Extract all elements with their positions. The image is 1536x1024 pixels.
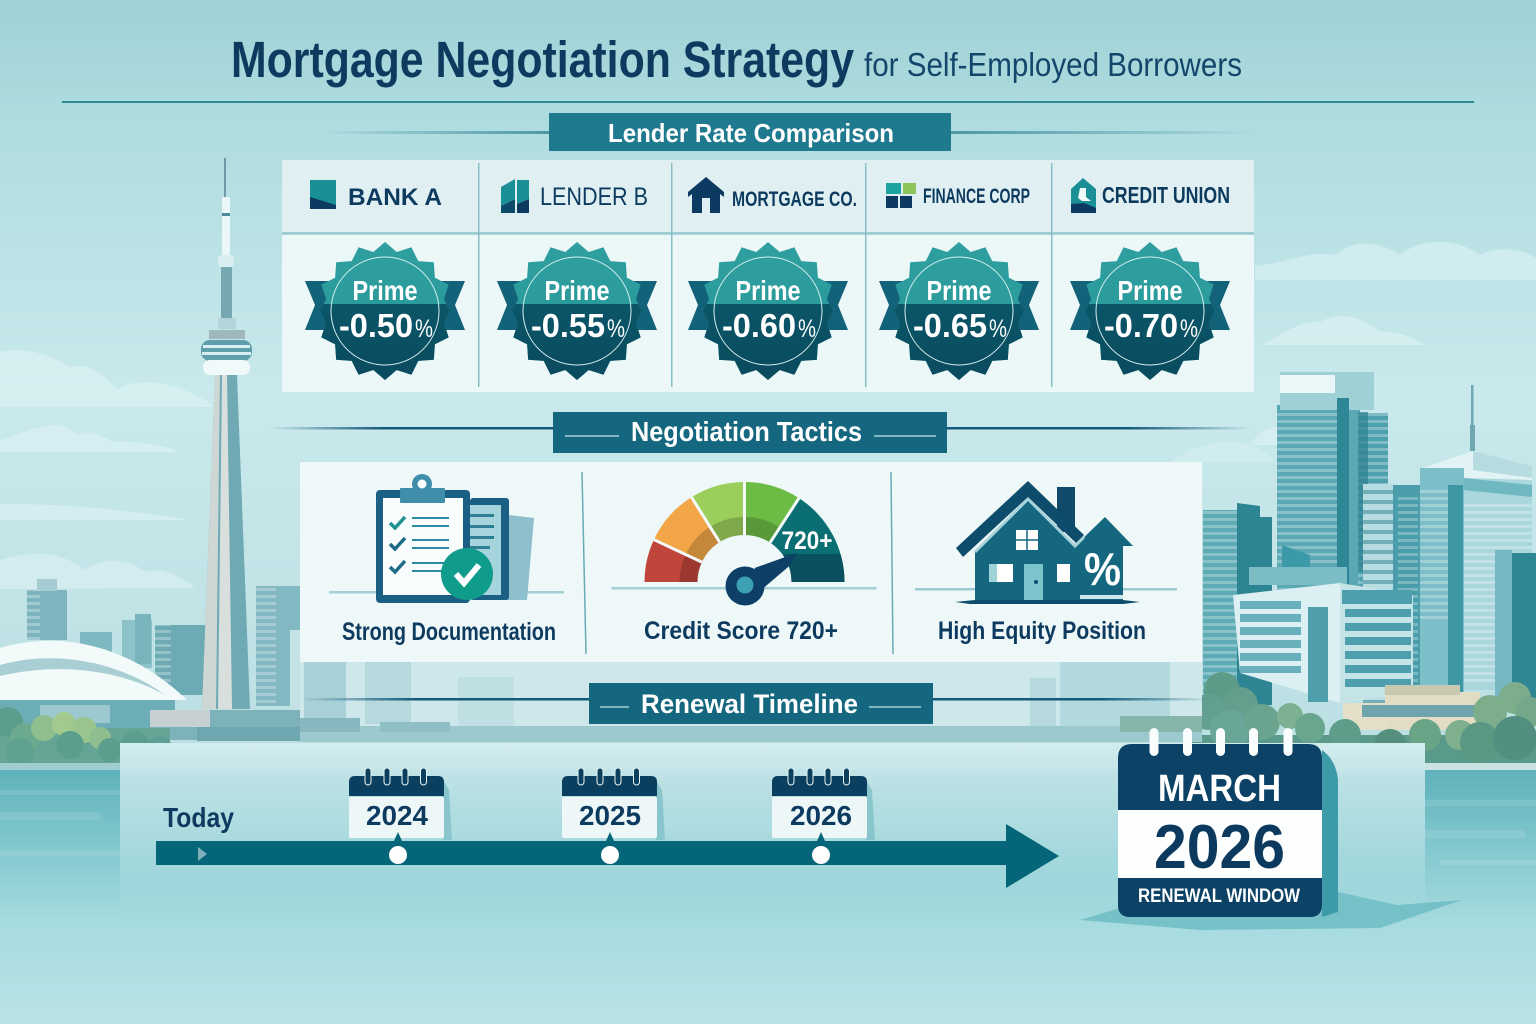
icon: credit score gauge	[612, 482, 876, 606]
label: High Equity Position: High Equity Position	[938, 617, 1146, 645]
badge: Prime -0.60%: %	[798, 315, 816, 343]
panel: negotiation tactics	[300, 462, 1202, 662]
logo: Bank A	[310, 180, 442, 211]
calendar: 2025	[562, 768, 665, 864]
logo: Bank A: BANK A	[348, 184, 442, 211]
background: clouds	[0, 242, 1536, 589]
title: for Self-Employed Borrowers	[864, 46, 1242, 83]
panel: lender rate comparison	[282, 160, 1254, 392]
badge: Prime -0.60%	[688, 242, 848, 380]
calendar: 2026	[772, 768, 875, 864]
background: water	[0, 770, 1536, 1024]
badge: Prime -0.50%	[305, 242, 465, 380]
logo: Lender B	[501, 179, 648, 213]
badge: Prime -0.70%: -0.70	[1104, 307, 1178, 344]
badge: Prime -0.60%: Prime	[736, 275, 800, 306]
background: water ripples	[0, 790, 1536, 865]
logo: Credit Union	[1071, 178, 1230, 213]
background: stadium dome	[0, 641, 187, 730]
logo: Finance Corp: FINANCE CORP	[923, 185, 1030, 208]
calendar: 2024: 2024	[366, 800, 428, 831]
badge: Prime -0.65%: -0.65	[913, 307, 987, 344]
calendar: March 2026 renewal window: 2026	[1154, 813, 1285, 882]
title: Mortgage Negotiation Strategy	[231, 31, 855, 88]
background: left trees	[0, 707, 172, 770]
badge: Prime -0.50%: Prime	[352, 275, 418, 306]
timeline arrow	[156, 824, 1059, 888]
icon: credit score gauge: 720+	[782, 527, 832, 555]
icon: clipboard with documents	[329, 474, 564, 603]
label: Strong Documentation: Strong Documentation	[342, 618, 556, 646]
calendar: March 2026 renewal window	[1080, 728, 1462, 930]
CN Tower	[150, 158, 307, 741]
logo: Mortgage Co.: MORTGAGE CO.	[732, 188, 857, 211]
badge: Prime -0.55%	[497, 242, 657, 380]
badge: Prime -0.65%: Prime	[926, 275, 992, 306]
calendar: 2026: 2026	[790, 800, 852, 831]
calendar: March 2026 renewal window: RENEWAL WINDOW	[1138, 886, 1300, 907]
background: left skyline	[27, 579, 304, 710]
badge: Prime -0.55%: %	[607, 315, 625, 343]
background: faded city behind panels	[300, 662, 1202, 742]
badge: Prime -0.50%: %	[415, 315, 433, 343]
badge: Prime -0.70%: %	[1180, 315, 1198, 343]
calendar: March 2026 renewal window: MARCH	[1158, 768, 1281, 810]
background: right skyline	[1203, 372, 1536, 730]
icon: house with percent: %	[1084, 543, 1121, 595]
heading: Lender Rate Comparison: Lender Rate Comparison	[608, 118, 894, 148]
badge: Prime -0.65%	[879, 242, 1039, 380]
logo: Mortgage Co.	[688, 177, 857, 213]
badge: Prime -0.70%: Prime	[1118, 275, 1182, 306]
badge: Prime -0.55%: Prime	[544, 275, 610, 306]
background: right trees	[1190, 672, 1536, 775]
logo: Credit Union: CREDIT UNION	[1102, 182, 1230, 208]
background: sky	[0, 0, 1536, 780]
heading: Negotiation Tactics: Negotiation Tactics	[631, 416, 862, 447]
logo: Lender B: LENDER B	[540, 183, 648, 211]
calendar: 2024	[349, 768, 452, 864]
panel: timeline backdrop	[120, 743, 1425, 918]
label: Credit Score 720+: Credit Score 720+	[644, 617, 838, 645]
badge: Prime -0.50%: -0.50	[339, 307, 413, 344]
badge: Prime -0.70%	[1070, 242, 1230, 380]
heading: Negotiation Tactics	[270, 412, 1250, 453]
logo: Finance Corp	[886, 183, 1030, 208]
badge: Prime -0.55%: -0.55	[531, 307, 605, 344]
badge: Prime -0.60%: -0.60	[722, 307, 796, 344]
icon: house with percent	[915, 481, 1177, 604]
heading: Lender Rate Comparison	[320, 113, 1261, 151]
badge: Prime -0.65%: %	[989, 315, 1007, 343]
heading: Renewal Timeline: Renewal Timeline	[641, 689, 858, 719]
label: Today: Today	[163, 802, 234, 833]
heading: Renewal Timeline	[300, 683, 1210, 724]
background: water behind timeline top	[120, 743, 1425, 770]
calendar: 2025: 2025	[579, 800, 641, 831]
